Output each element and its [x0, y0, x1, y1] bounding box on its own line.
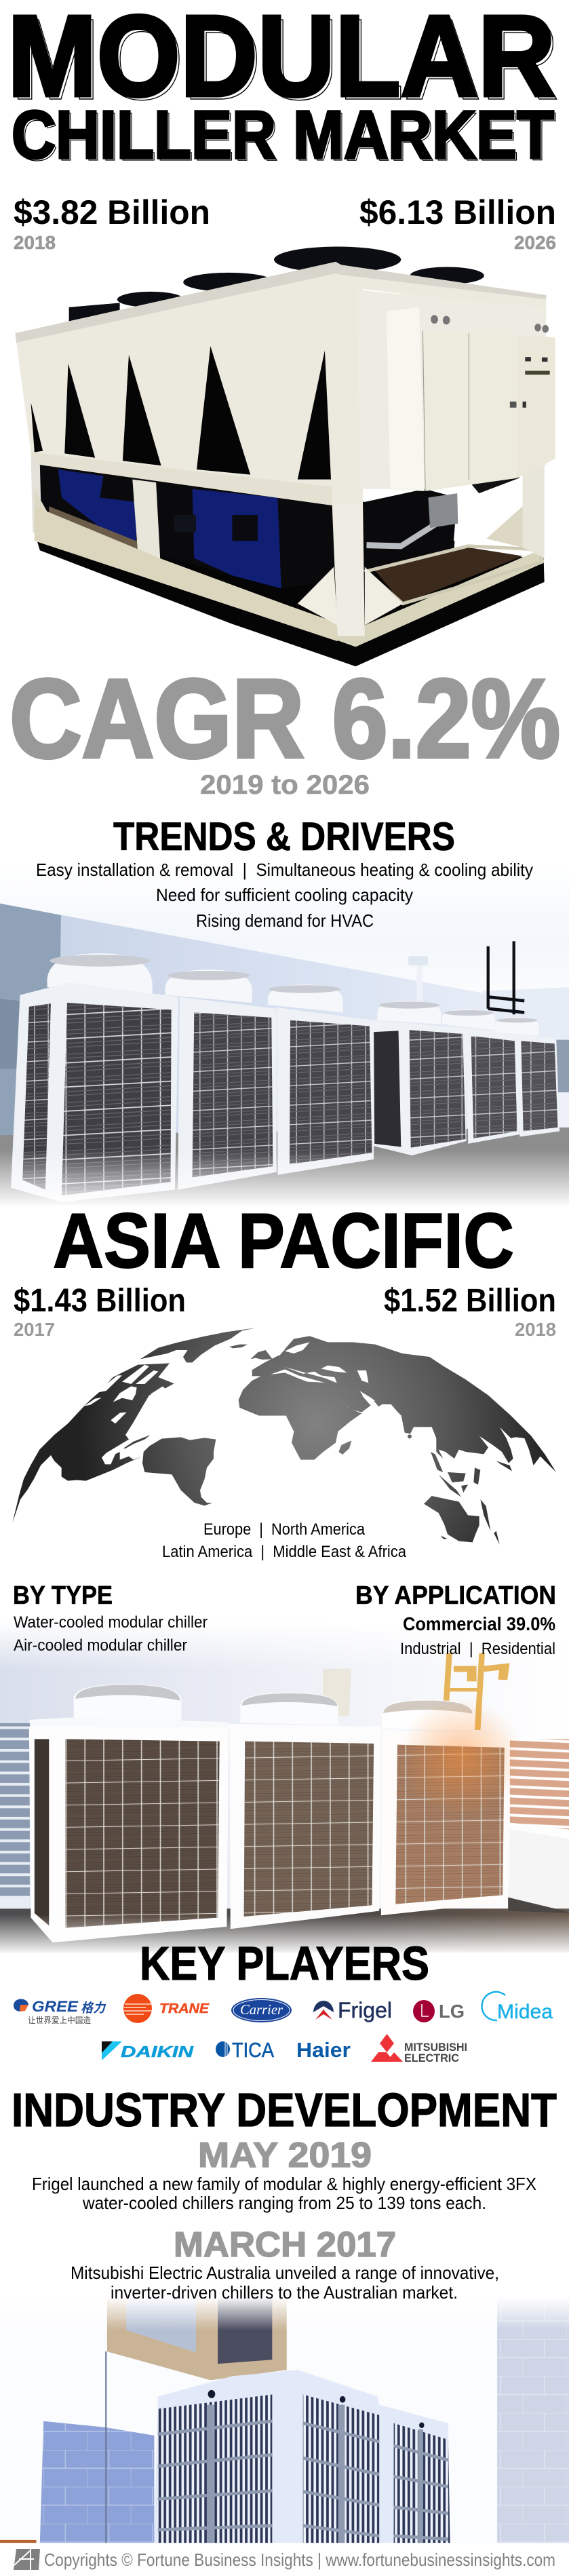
European and Asian water gaps [273, 1342, 375, 1401]
CAGR figure [9, 656, 560, 800]
Africa [239, 1372, 361, 1460]
photo: rooftop chiller row [0, 862, 569, 1208]
Sri Lanka [408, 1434, 412, 1438]
Hudson Bay and Arctic gaps [84, 1365, 165, 1423]
trends list: Need for sufficient cooling capacity [156, 885, 413, 905]
photo: modular chiller unit [15, 247, 555, 666]
window [107, 2299, 287, 2380]
logo: Gree [14, 1998, 106, 2025]
North America [12, 1363, 174, 1523]
unit A [29, 1684, 229, 1942]
market value 2026: 2026 [514, 232, 556, 253]
type list: Water-cooled modular chiller [14, 1613, 208, 1632]
market value 2026 [359, 193, 556, 253]
development: March 2017: MARCH 2017 [174, 2225, 396, 2265]
condenser unit body [154, 2370, 450, 2543]
heading: trends and drivers: TRENDS & DRIVERS [113, 815, 455, 859]
application list: Industrial | Residential [400, 1640, 555, 1658]
other regions list: Europe | North America [203, 1520, 366, 1539]
logo: LG: LG [439, 2001, 465, 2022]
logo: Gree: 让世界爱上中国造 [28, 2015, 91, 2025]
development: March 2017: Mitsubishi Electric Australia unveiled a range of innovative, [71, 2263, 499, 2283]
logo: Daikin: DAIKIN [121, 2043, 194, 2060]
British Isles [250, 1350, 273, 1360]
application list [400, 1613, 555, 1658]
logo: Mitsubishi Electric: MITSUBISHI [404, 2041, 467, 2054]
trends list: Easy installation & removal | Simultaneous heating & cooling ability [36, 860, 533, 880]
logo: Mitsubishi Electric [371, 2034, 467, 2064]
development: May 2019: Frigel launched a new family of modular & highly energy-efficient 3FX [32, 2174, 536, 2194]
Eurasia [252, 1336, 556, 1472]
Asia Pacific value 2017 [14, 1283, 186, 1340]
Asia Pacific value 2018 [384, 1283, 556, 1340]
other regions list: Latin America | Middle East & Africa [162, 1543, 407, 1561]
title [7, 0, 559, 175]
unit 6 [495, 1017, 560, 1137]
Cuba [123, 1435, 151, 1448]
logo: Tica [216, 2038, 274, 2062]
logo: Gree: 格力 [81, 2001, 106, 2016]
trends list: Rising demand for HVAC [196, 910, 374, 931]
logo: Carrier: Carrier [240, 2001, 283, 2018]
logo: Midea: Midea [497, 2001, 553, 2023]
market value 2026: $6.13 Billion [359, 193, 556, 231]
Southeast Asia islands [431, 1452, 512, 1531]
Asia Pacific value 2017: $1.43 Billion [14, 1283, 186, 1319]
logo: Tica: TICA [232, 2038, 274, 2062]
logo: LG [413, 2000, 465, 2022]
heading: key players: KEY PLAYERS [140, 1937, 429, 1990]
South America [142, 1437, 216, 1505]
Greenland [140, 1328, 256, 1362]
Tasmania and New Zealand [441, 1531, 500, 1545]
logo: Frigel [313, 1998, 392, 2022]
development: March 2017 [71, 2225, 499, 2303]
other regions list [162, 1520, 407, 1561]
development: May 2019 [32, 2136, 536, 2213]
logo: Trane: TRANE [159, 2001, 210, 2016]
Asia Pacific value 2018: $1.52 Billion [384, 1283, 556, 1319]
world map dome [12, 1328, 556, 1545]
Iceland [229, 1345, 248, 1348]
CAGR period: 2019 to 2026 [200, 770, 370, 800]
type list [14, 1613, 208, 1655]
market value 2018 [14, 193, 210, 253]
logo: Trane [123, 1994, 210, 2023]
Asia Pacific value 2017: 2017 [14, 1319, 55, 1340]
heading: by type: BY TYPE [13, 1581, 113, 1610]
market value 2018: $3.82 Billion [14, 193, 210, 231]
photo: three chillers with sun glare [0, 1621, 569, 1955]
unit 3 [268, 984, 374, 1175]
unit 1 [11, 953, 178, 1202]
logo: Frigel: Frigel [338, 1998, 392, 2022]
photo: outdoor condenser unit [0, 2296, 569, 2543]
development: May 2019: MAY 2019 [198, 2136, 372, 2175]
heading: Asia Pacific: ASIA PACIFIC [53, 1198, 514, 1284]
type list: Air-cooled modular chiller [14, 1636, 187, 1655]
market value 2018: 2018 [14, 232, 56, 253]
unit B [229, 1693, 381, 1929]
trends list [36, 860, 533, 931]
logos: key players [14, 1992, 553, 2064]
switch box [323, 1668, 351, 1716]
logo: Midea [482, 1992, 553, 2023]
unit 4 [374, 1001, 467, 1155]
application list: Commercial 39.0% [403, 1613, 555, 1634]
logo: Carrier [231, 1998, 292, 2022]
logo: Haier: Haier [296, 2038, 351, 2062]
Asia Pacific value 2018: 2018 [515, 1319, 556, 1340]
gold bracket [446, 1653, 505, 1730]
logo: Gree: GREE [32, 1998, 79, 2015]
unit 2 [165, 969, 277, 1190]
logo: Mitsubishi Electric: ELECTRIC [404, 2052, 459, 2064]
heading: by application: BY APPLICATION [355, 1581, 556, 1610]
Madagascar [338, 1440, 351, 1455]
Australia [424, 1496, 479, 1542]
development: May 2019: water-cooled chillers ranging from 25 to 139 tons each. [82, 2193, 486, 2213]
unit 5 [442, 1010, 519, 1144]
unit C [381, 1700, 510, 1915]
logo: Daikin [102, 2041, 194, 2060]
icon: Fortune Business Insights logo [14, 2549, 40, 2570]
development: March 2017: inverter-driven chillers to the Australian market. [111, 2282, 458, 2303]
footer [14, 2549, 555, 2570]
